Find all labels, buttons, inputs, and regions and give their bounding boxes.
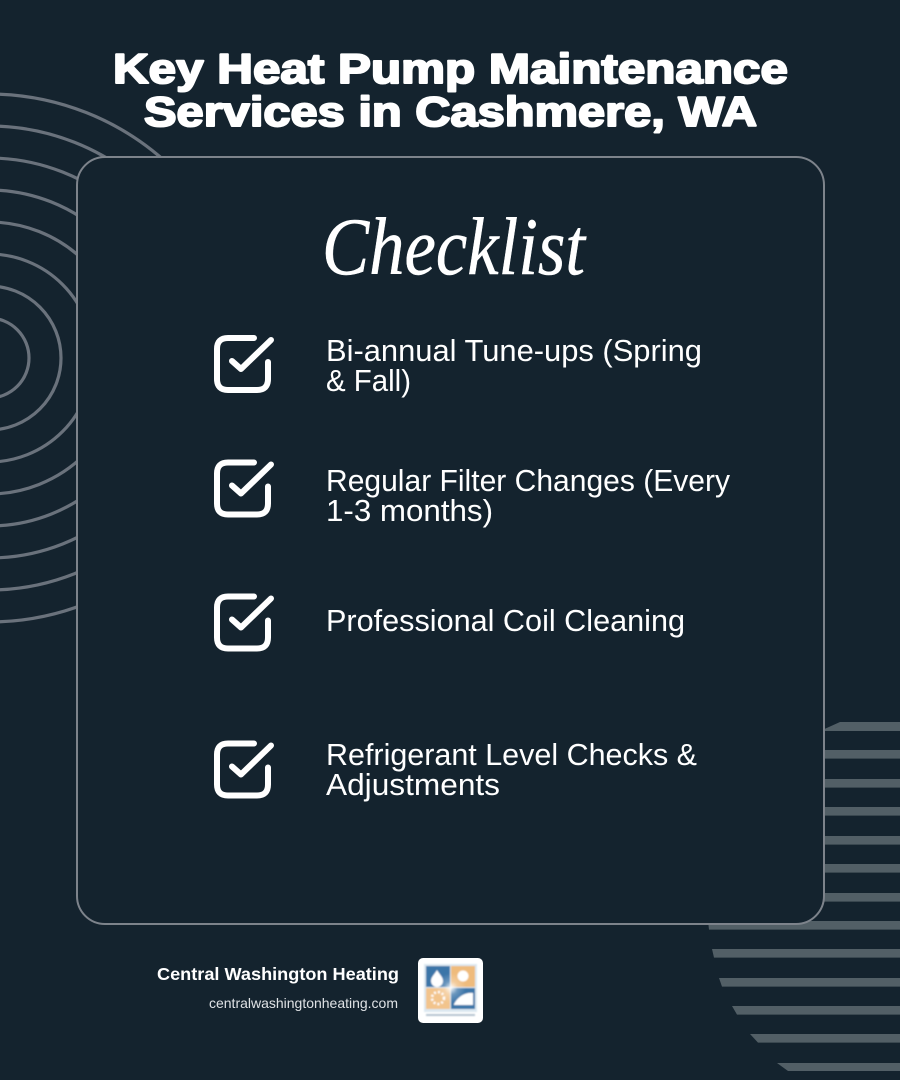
- checklist item: refrigerant checks: Refrigerant Level Checks &: [326, 738, 697, 772]
- checklist item: tune-ups: [217, 334, 702, 398]
- icon: checkbox: [217, 338, 271, 390]
- footer brand text: centralwashingtonheating.com: [209, 996, 398, 1011]
- checklist item: tune-ups: & Fall): [326, 364, 411, 398]
- icon: company logo: [418, 958, 483, 1023]
- checklist item: filter changes: Regular Filter Changes (Every: [326, 464, 731, 498]
- icon: checkbox: [217, 596, 271, 648]
- checklist item: refrigerant checks: Adjustments: [326, 768, 500, 802]
- title: [113, 45, 788, 135]
- title: Services in Cashmere, WA: [144, 88, 757, 135]
- checklist item: coil cleaning: Professional Coil Cleaning: [326, 604, 685, 638]
- decorative stripes: [708, 722, 900, 1071]
- checklist item: refrigerant checks: [217, 738, 697, 802]
- footer brand text: [157, 964, 399, 1011]
- checklist item: coil cleaning: [217, 596, 685, 648]
- title: Key Heat Pump Maintenance: [113, 45, 788, 92]
- heading: Checklist: Checklist: [322, 201, 587, 292]
- decorative concentric rings: [0, 94, 253, 622]
- icon: checkbox: [217, 744, 271, 796]
- icon: checkbox: [217, 462, 271, 514]
- checklist item: filter changes: 1-3 months): [326, 494, 493, 528]
- checklist item: filter changes: [217, 462, 731, 528]
- panel: checklist card: [77, 157, 824, 924]
- checklist item: tune-ups: Bi-annual Tune-ups (Spring: [326, 334, 702, 368]
- footer brand text: Central Washington Heating: [157, 964, 399, 984]
